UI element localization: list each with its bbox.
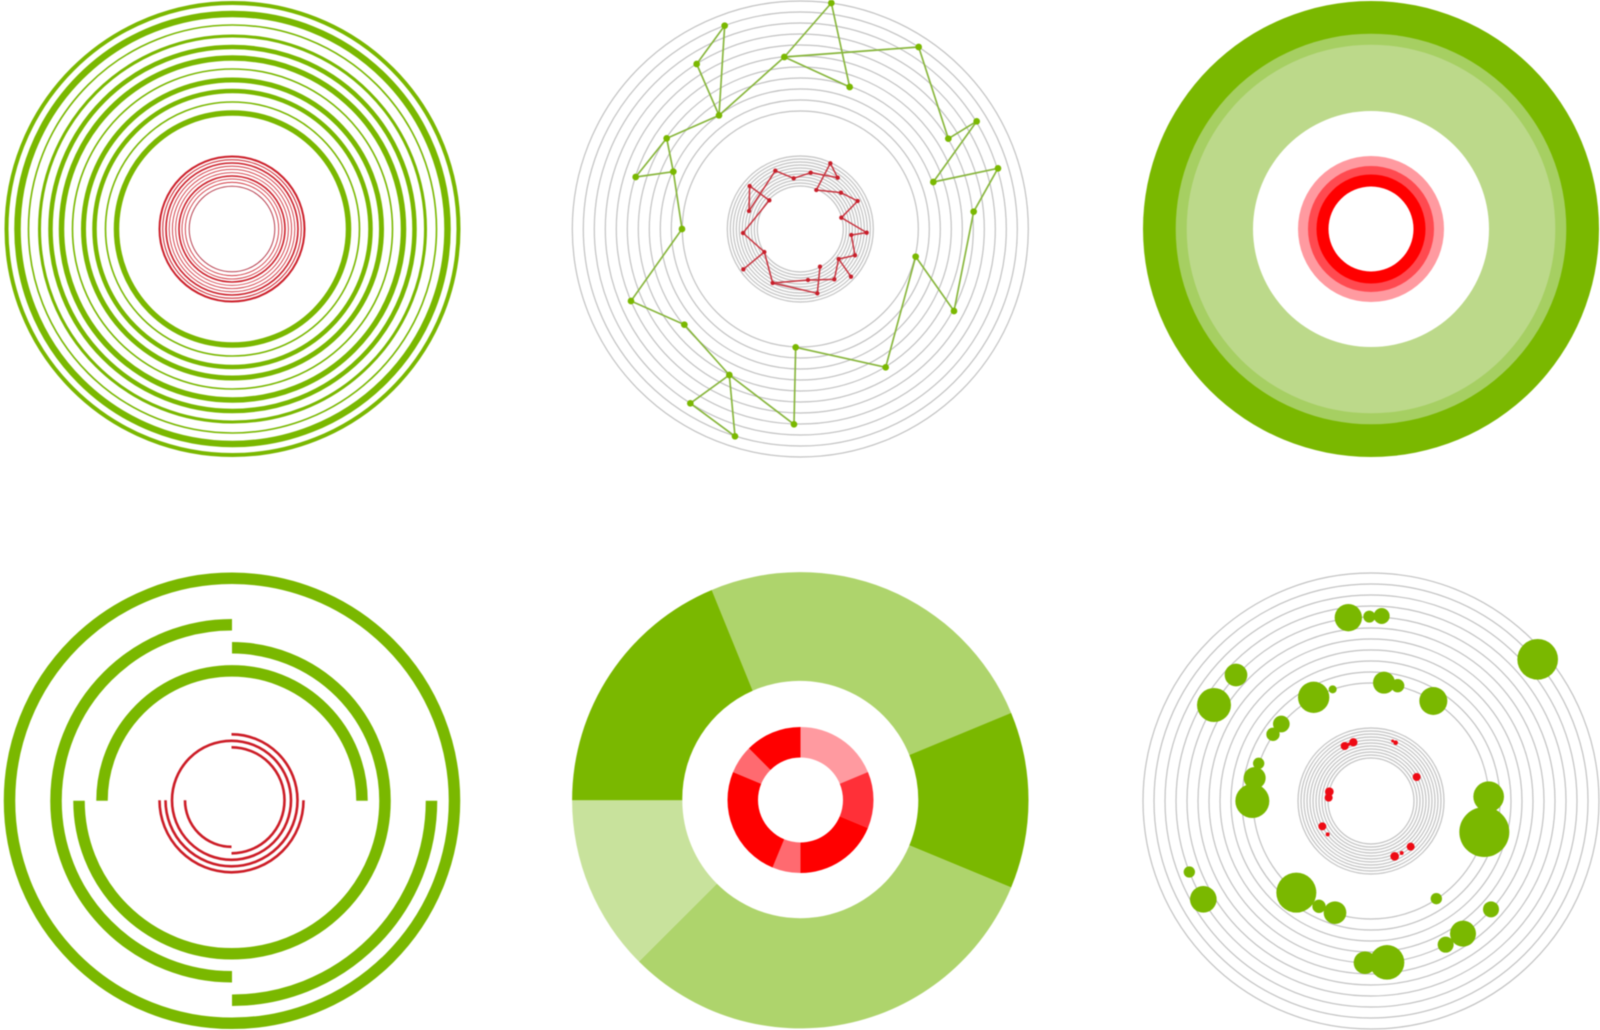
red layered disc: [1298, 156, 1444, 302]
panel: bubble chart on ring grid: [1143, 573, 1599, 1029]
red arcs: [160, 734, 304, 872]
panel: segmented donut: [572, 572, 1029, 1028]
green arcs: [10, 578, 454, 1023]
panel: radial arcs: [10, 578, 454, 1023]
red line series: [741, 161, 869, 295]
green bubbles: [1184, 604, 1558, 980]
grid rings: [1143, 573, 1599, 1029]
grid rings: [572, 1, 1028, 457]
green donut segments: [572, 572, 1029, 1028]
panel: radar line chart on ring grid: [572, 0, 1028, 457]
red rings: [160, 156, 304, 302]
green line series: [628, 0, 1001, 440]
green rings: [6, 3, 458, 455]
green layered disc: [1143, 1, 1599, 457]
red bubbles: [1318, 738, 1421, 861]
panel: concentric rings of varying width: [6, 3, 458, 455]
panel: layered solid rings: [1143, 1, 1599, 457]
red donut segments: [728, 727, 873, 873]
